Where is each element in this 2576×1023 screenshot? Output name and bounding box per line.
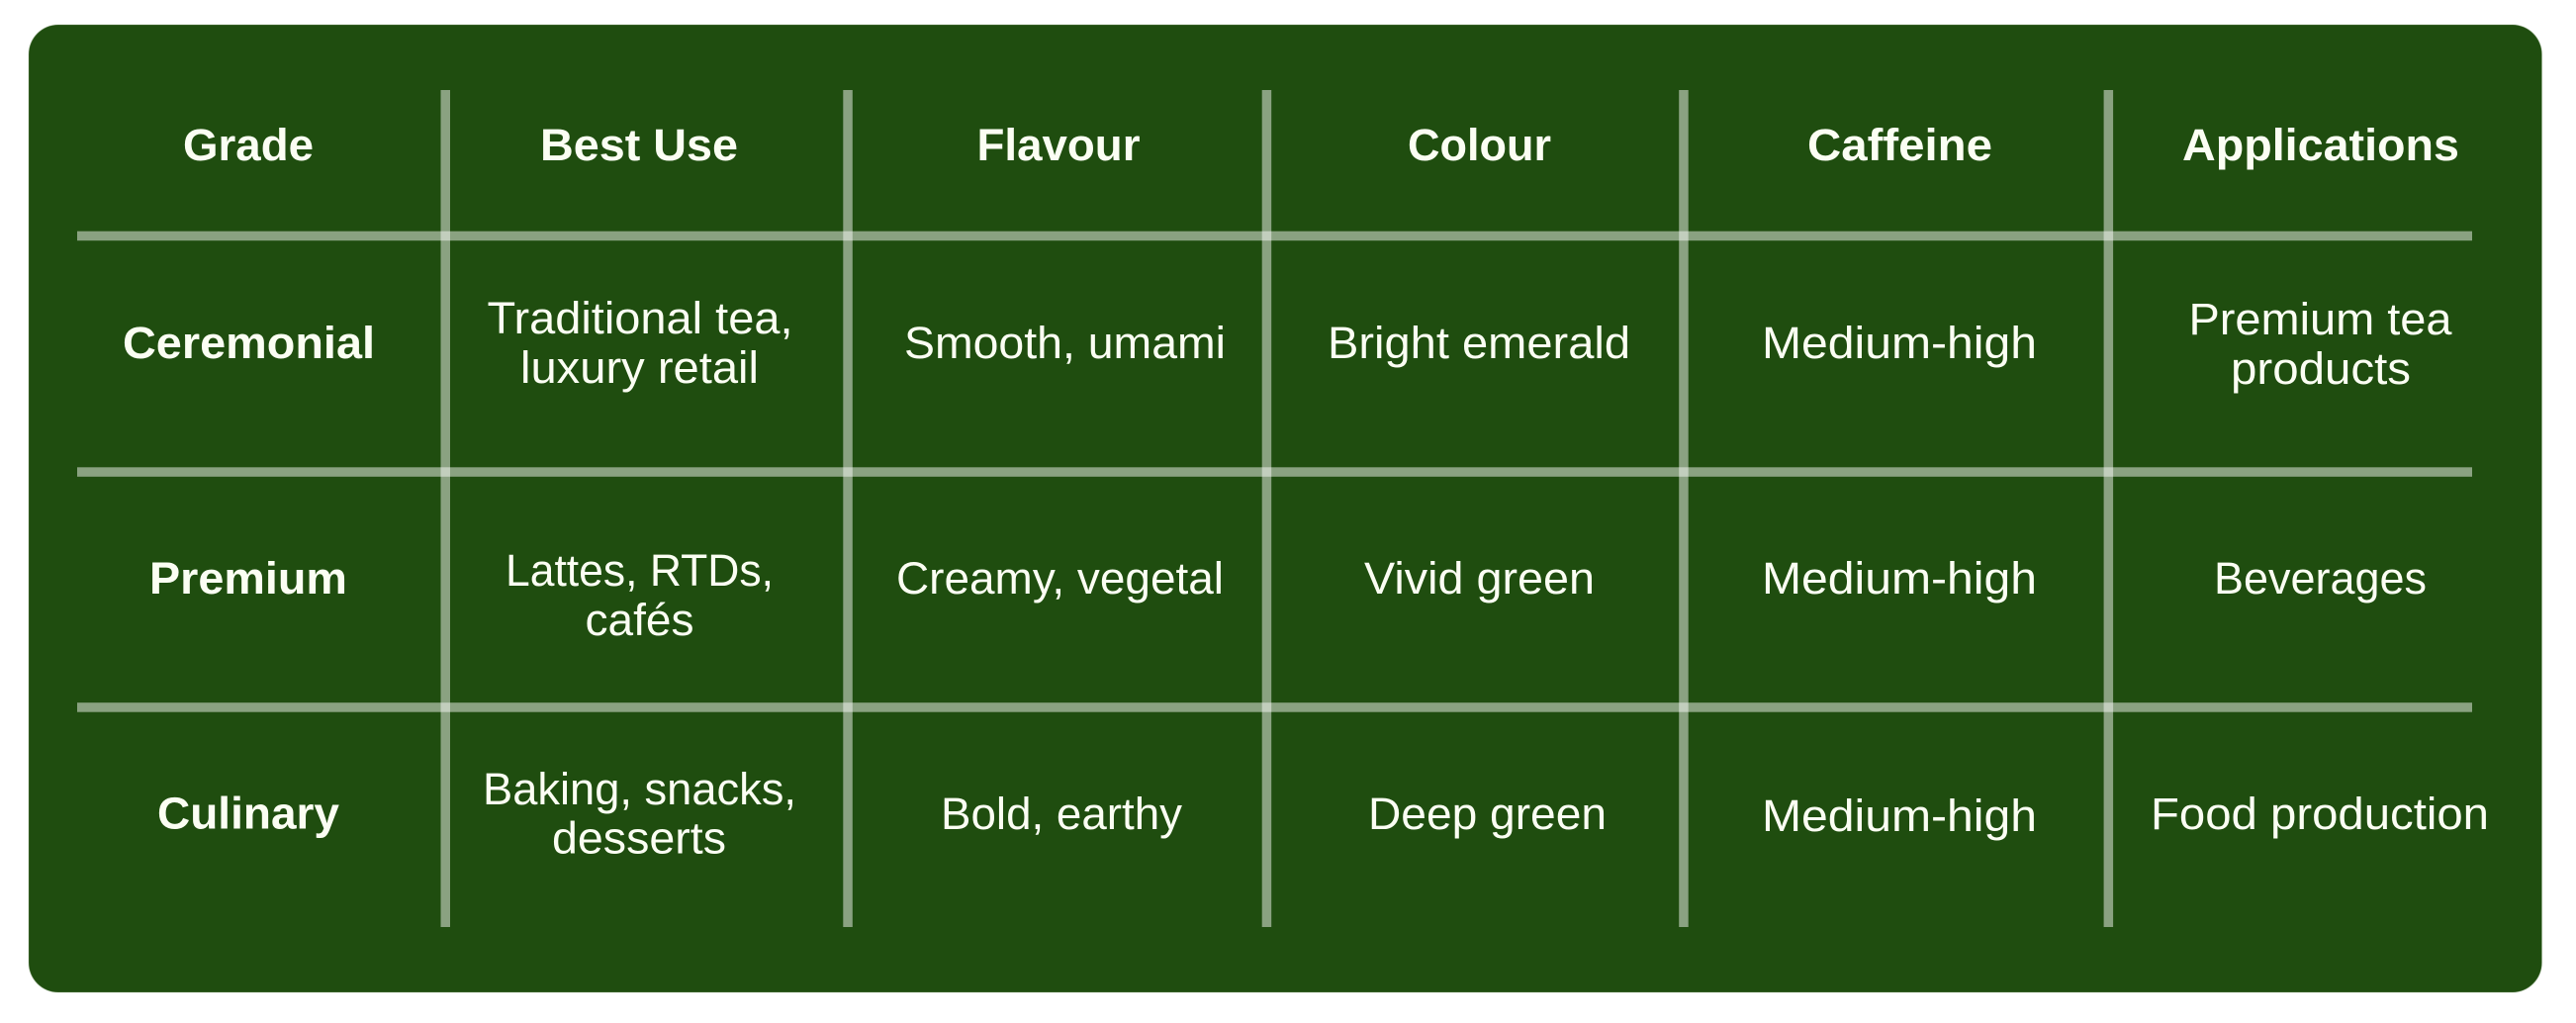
applications: premium tea products [2188,294,2453,394]
best use: lattes, RTDs, cafés: Lattes, RTDs, [506,545,774,596]
applications: premium tea products: Premium tea [2188,294,2453,344]
table grid lines [77,90,2472,927]
heading: Best Use: Best Use [540,120,738,170]
row: Culinary [157,764,2489,863]
best use: traditional tea, luxury retail: Traditional tea, [487,293,793,343]
heading: Caffeine: Caffeine [1807,120,1992,170]
flavour: smooth, umami: Smooth, umami [904,318,1226,368]
colour: vivid green: Vivid green [1364,553,1595,604]
applications: premium tea products: products [2231,343,2411,394]
best use: baking, snacks, desserts: desserts [552,813,726,863]
colour: bright emerald: Bright emerald [1328,318,1630,368]
best use: lattes, RTDs, cafés [506,545,774,645]
row: Ceremonial [123,293,2453,394]
caffeine: medium-high: Medium-high [1762,553,2037,604]
applications: beverages: Beverages [2214,553,2427,604]
heading: Colour: Colour [1408,120,1551,170]
header row [183,120,2459,170]
flavour: creamy, vegetal: Creamy, vegetal [896,553,1224,604]
row label: Ceremonial: Ceremonial [123,318,375,368]
caffeine: medium-high: Medium-high [1762,790,2037,841]
best use: lattes, RTDs, cafés: cafés [586,595,694,645]
applications: food production: Food production [2151,789,2489,839]
flavour: bold, earthy: Bold, earthy [941,789,1183,839]
best use: baking, snacks, desserts [483,764,796,863]
heading: Flavour: Flavour [977,120,1140,170]
colour: deep green: Deep green [1368,789,1607,839]
best use: baking, snacks, desserts: Baking, snacks, [483,764,796,814]
best use: traditional tea, luxury retail: luxury retail [520,342,759,393]
heading: Grade: Grade [183,120,314,170]
row label: Premium: Premium [149,553,347,604]
caffeine: medium-high: Medium-high [1762,318,2037,368]
row label: Culinary: Culinary [157,788,339,839]
best use: traditional tea, luxury retail [487,293,793,393]
heading: Applications: Applications [2182,120,2459,170]
row: Premium [149,545,2427,645]
